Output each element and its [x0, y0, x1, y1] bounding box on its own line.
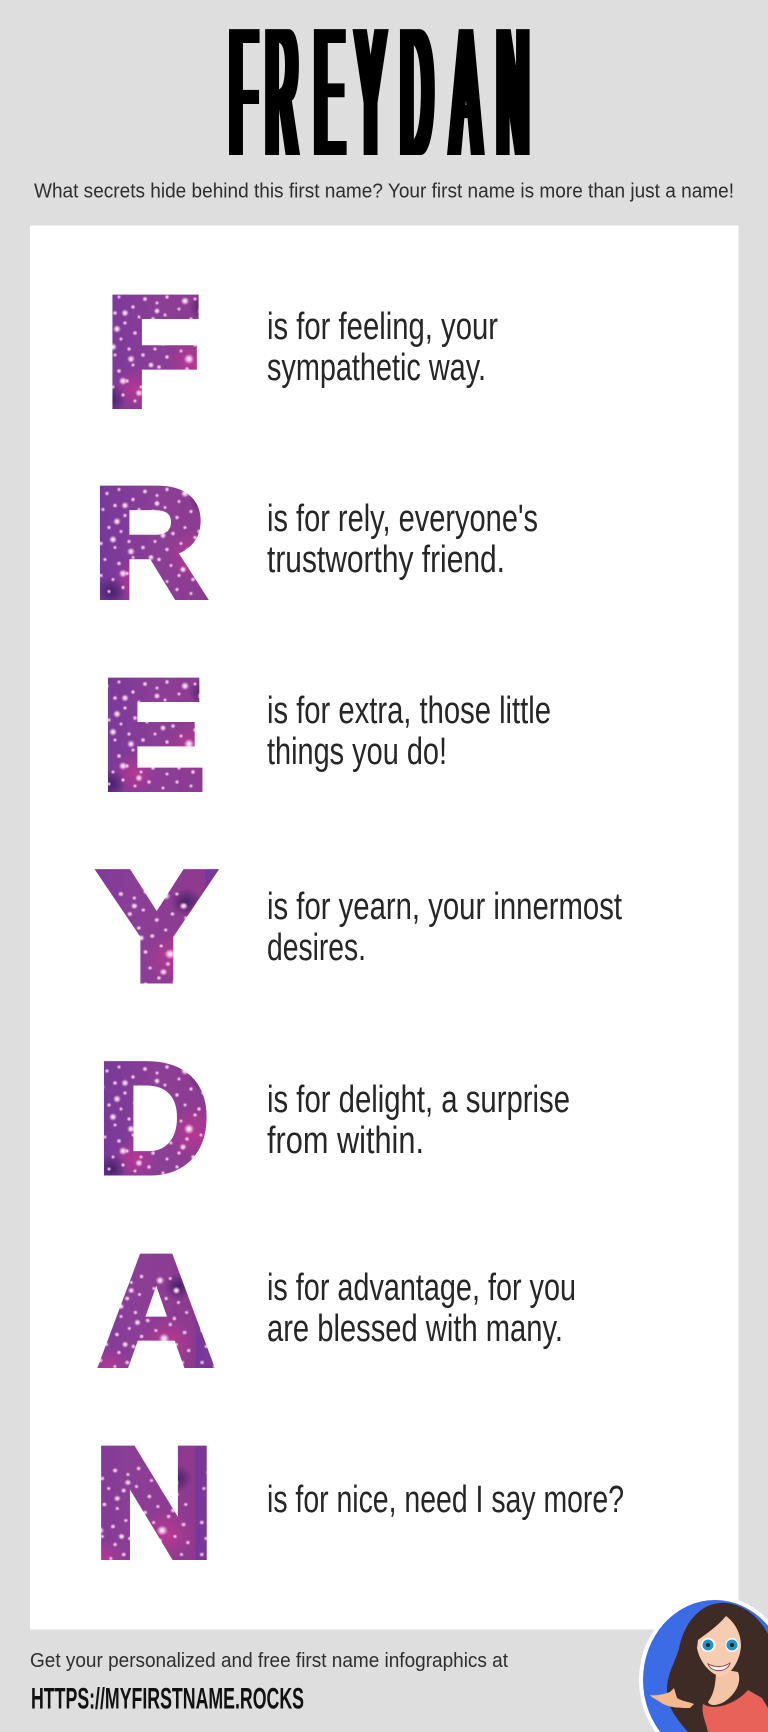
text: D meaning — [267, 1079, 570, 1162]
text: A meaning — [267, 1267, 576, 1350]
letter D: D — [97, 1032, 210, 1206]
text: R meaning: trustworthy friend. — [267, 539, 505, 581]
letter Y: Y — [98, 840, 215, 1014]
avatar shirt — [703, 1690, 768, 1732]
row: Y — [98, 840, 622, 1014]
letter E: E — [101, 648, 205, 822]
text: F meaning: is for feeling, your — [267, 306, 498, 348]
text: F meaning — [267, 306, 498, 389]
letter R: R — [93, 456, 206, 630]
text: N meaning: is for nice, need I say more? — [267, 1479, 624, 1521]
avatar neck and face — [708, 1668, 739, 1705]
footer text: Get your personalized and free first name infographics at — [30, 1650, 508, 1672]
row: N — [94, 1416, 624, 1590]
text: Y meaning: is for yearn, your innermost — [267, 886, 622, 928]
text: D meaning: from within. — [267, 1120, 424, 1162]
avatar eyes — [700, 1638, 738, 1652]
text: R meaning: is for rely, everyone's — [267, 498, 538, 540]
panel: letters — [30, 226, 738, 1630]
text: Y meaning — [267, 886, 622, 969]
letter F: F — [106, 266, 201, 440]
text: A meaning: is for advantage, for you — [267, 1267, 576, 1309]
text: E meaning — [267, 690, 551, 773]
text: R meaning — [267, 498, 538, 581]
footer url: HTTPS://MYFIRSTNAME.ROCKS — [31, 1682, 304, 1716]
panel background — [30, 226, 738, 1630]
row: F — [106, 266, 498, 440]
text: E meaning: is for extra, those little — [267, 690, 551, 732]
avatar hand — [650, 1688, 694, 1708]
row: D — [97, 1032, 570, 1206]
text: E meaning: things you do! — [267, 731, 447, 773]
row: A — [98, 1224, 576, 1398]
avatar smile — [708, 1663, 730, 1671]
text: F meaning: sympathetic way. — [267, 347, 486, 389]
letter A: A — [98, 1224, 214, 1398]
text: Y meaning: desires. — [267, 927, 366, 969]
letter N: N — [94, 1416, 214, 1590]
text: D meaning: is for delight, a surprise — [267, 1079, 570, 1121]
avatar hair — [667, 1603, 768, 1732]
text: A meaning: are blessed with many. — [267, 1308, 563, 1350]
icon: avatar — [639, 1596, 768, 1732]
row: E — [101, 648, 551, 822]
row: R — [93, 456, 538, 630]
subtitle: What secrets hide behind this first name? Your first name is more than just a name! — [34, 180, 734, 202]
